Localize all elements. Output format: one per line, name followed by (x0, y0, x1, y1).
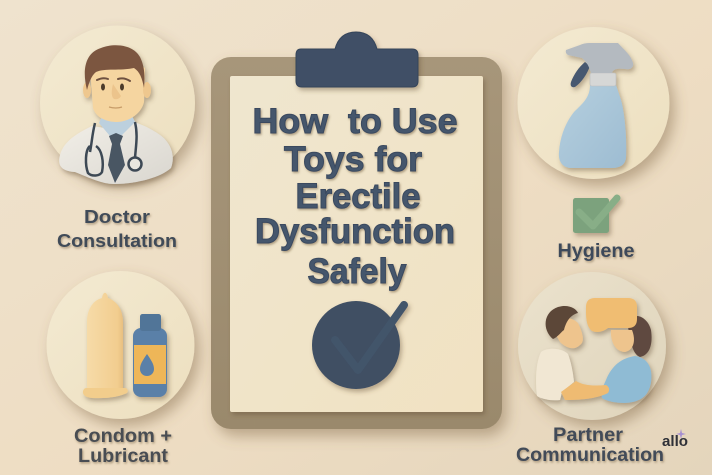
title: Dysfunction (255, 212, 455, 251)
face (90, 60, 145, 122)
panel: condom and lubricant (46, 271, 194, 467)
condom disc (46, 271, 194, 419)
icon: green check (573, 198, 617, 233)
panel: clipboard (211, 32, 502, 429)
title: Toys for (284, 140, 422, 179)
label: partner communication: Partner (553, 425, 624, 446)
label: doctor consultation (57, 207, 177, 251)
clipboard board (211, 57, 502, 429)
panel: doctor consultation (40, 26, 195, 251)
trigger (571, 62, 590, 87)
label: doctor consultation: Consultation (57, 231, 177, 251)
icon: condom (83, 293, 128, 398)
sprayer head (566, 43, 633, 73)
lab coat (59, 122, 173, 184)
speech bubble (586, 298, 637, 332)
label: condom and lubricant: Condom + (74, 426, 172, 447)
title: Safely (308, 252, 407, 291)
collar (590, 73, 616, 86)
panel: hygiene (518, 27, 670, 262)
label: partner communication: Communication (516, 445, 664, 466)
woman head (611, 330, 634, 352)
hygiene disc (518, 27, 670, 179)
label: hygiene: Hygiene (558, 241, 634, 262)
clipboard paper (230, 76, 483, 412)
woman body (602, 356, 651, 403)
clasped arms (561, 381, 609, 400)
hair (85, 45, 145, 90)
logo: allo health (662, 429, 688, 450)
label: partner communication (516, 425, 664, 466)
panel: partner communication (516, 272, 666, 466)
bottle body (559, 85, 626, 168)
icon: doctor (59, 45, 173, 184)
icon: spray bottle (559, 43, 633, 168)
title: Erectile (296, 177, 420, 216)
woman hair (627, 316, 652, 357)
clipboard clip (296, 32, 418, 87)
icon: lubricant bottle (133, 314, 167, 397)
icon: check badge (312, 301, 404, 389)
logo wordmark: allo (662, 433, 688, 450)
man shirt (536, 349, 574, 400)
label: doctor consultation: Doctor (84, 207, 150, 227)
label: condom and lubricant (74, 426, 172, 467)
logo sparkle (676, 429, 686, 439)
label: condom and lubricant: Lubricant (78, 446, 169, 467)
man head (552, 318, 583, 348)
title: How to Use (252, 102, 458, 141)
partner disc (518, 272, 666, 420)
icon: partners (536, 298, 652, 403)
doctor disc (40, 26, 195, 180)
title (252, 102, 458, 291)
